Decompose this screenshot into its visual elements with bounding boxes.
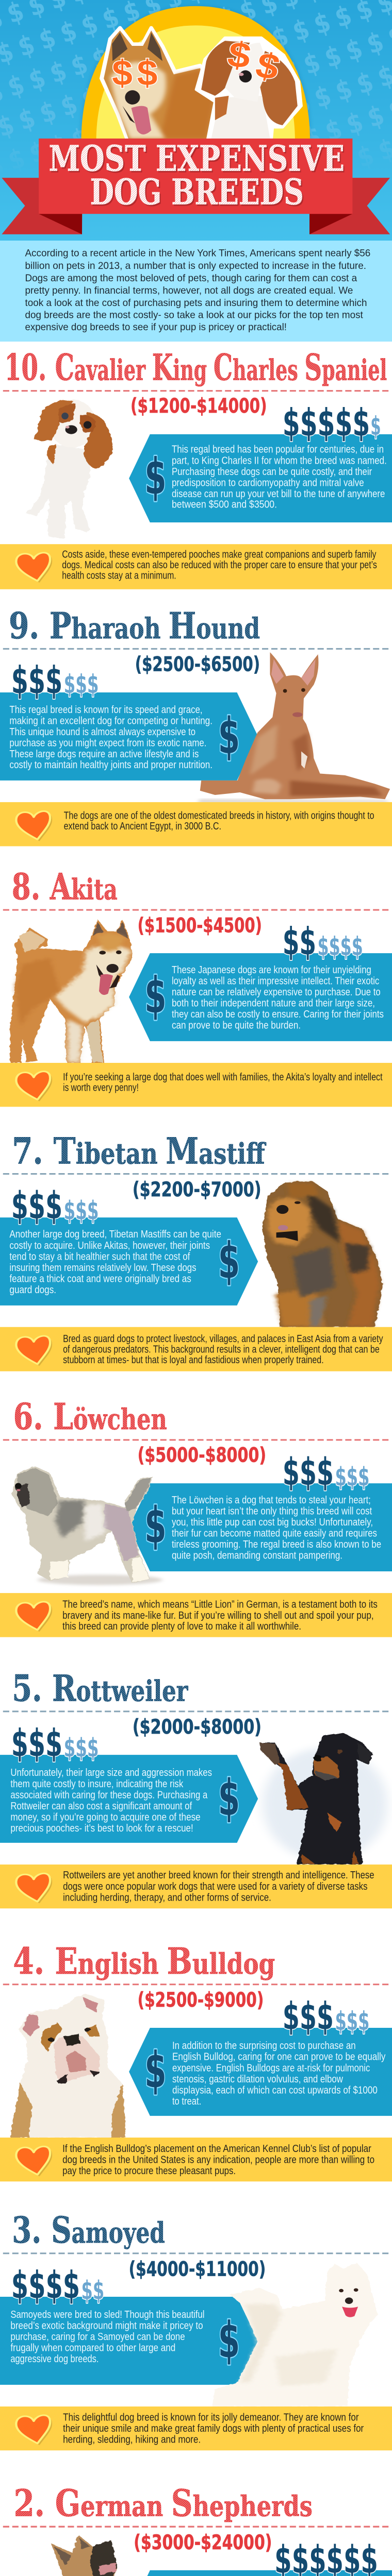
panel: 10 Cavalier King Charles Spaniel: $ — [144, 448, 167, 506]
description: between $500 and $3500. — [172, 499, 277, 510]
samoyed face — [339, 2288, 358, 2317]
description: to treat. — [172, 2095, 201, 2107]
blue description banner — [0, 692, 258, 781]
price rating dollars: $$$ — [11, 1721, 62, 1765]
description — [172, 2040, 386, 2107]
icon: heart — [16, 2146, 52, 2176]
blue description banner — [129, 434, 392, 522]
fact text — [63, 2412, 364, 2445]
price range: ($2200-$7000) — [133, 1178, 262, 1201]
yellow fact band — [0, 544, 392, 589]
header illustration and banner — [2, 6, 390, 234]
blue description banner — [0, 1755, 258, 1843]
fact text — [63, 1870, 374, 1903]
fact text: pay the price to procure these pleasant pups. — [62, 2165, 236, 2177]
pharaoh hound illustration — [198, 652, 390, 803]
price range: ($5000-$8000) — [138, 1444, 266, 1467]
fact text — [64, 810, 374, 832]
yellow fact band — [0, 2138, 392, 2181]
cavalier face — [61, 413, 91, 434]
description: purchase, caring for a Samoyed can be done — [10, 2331, 185, 2343]
description: them quite costly to insure, indicating the risk — [10, 1778, 184, 1790]
title: 2. German Shepherds — [14, 2482, 313, 2524]
title: 6. Löwchen — [13, 1395, 167, 1438]
panel: 7 Tibetan Mastiff: $$$ — [64, 1195, 99, 1226]
akita illustration — [10, 919, 133, 1063]
icon: heart — [16, 1873, 52, 1903]
description — [172, 444, 387, 510]
panel: 5 Rottweiler — [0, 1667, 392, 1908]
panel: 7 Tibetan Mastiff: $ — [218, 1232, 240, 1290]
fact text — [63, 1072, 383, 1094]
icon: heart — [16, 1336, 52, 1366]
icon: cavalier with dollar eyes — [196, 38, 301, 141]
title — [49, 138, 346, 215]
icon: heart — [16, 811, 52, 841]
description — [9, 1229, 221, 1296]
description: This unique hound is almost always expensive to — [9, 726, 195, 738]
description: purchase as you might expect from its exotic name. — [9, 737, 206, 749]
samoyed illustration — [213, 2263, 378, 2406]
sun dome — [81, 6, 310, 141]
fact text: herding, sledding, hiking and more. — [63, 2434, 201, 2445]
dollar eyes: $ — [137, 54, 157, 93]
yellow fact band — [0, 1063, 392, 1107]
description: insuring them remains relatively low. These dogs — [9, 1262, 196, 1274]
yellow fact band — [0, 2406, 392, 2450]
fact text: extend back to Ancient Egypt, in 3000 B.C. — [64, 820, 221, 832]
title: 5. Rottweiler — [12, 1667, 188, 1709]
description: This regal breed is known for its speed and grace, — [9, 704, 203, 716]
price rating dollars: $$$$ — [11, 2263, 80, 2307]
yellow fact band — [0, 1865, 392, 1908]
fact text — [63, 1333, 383, 1366]
fact text — [62, 549, 377, 581]
yellow fact band — [0, 802, 392, 846]
description: associated with caring for these dogs. Purchasing a — [10, 1789, 207, 1801]
title: 4. English Bulldog — [13, 1940, 275, 1982]
description — [10, 2309, 204, 2365]
blue description banner — [0, 2297, 258, 2385]
description: feature a thick coat and were originally bred as — [9, 1273, 191, 1284]
panel: 9 Pharaoh Hound — [0, 604, 392, 846]
description: costly to acquire. Unlike Akitas, however, their joints — [9, 1240, 210, 1251]
fact text — [62, 2143, 374, 2177]
header blue background — [0, 0, 392, 241]
lowchen illustration — [11, 1466, 162, 1585]
title: 9. Pharaoh Hound — [9, 604, 260, 647]
description — [9, 704, 213, 771]
bulldog illustration — [10, 1993, 126, 2138]
panel: 9 Pharaoh Hound: $ — [218, 707, 240, 765]
description: Samoyeds were bred to sled! Though this beautiful — [10, 2309, 204, 2320]
intro text: expensive dog breeds to see if your pup is pricey or practical! — [25, 321, 287, 332]
icon: heart — [16, 553, 52, 583]
description: guard dogs. — [9, 1284, 56, 1296]
description: These large dogs require an active lifestyle and is — [9, 748, 199, 760]
price rating dollars — [11, 2263, 104, 2307]
panel: 5 Rottweiler: $ — [218, 1770, 240, 1827]
lowchen face — [15, 1483, 22, 1491]
description: tend to stay a bit healthier such that the cost of — [9, 1251, 190, 1262]
price rating dollars: $$$ — [11, 658, 62, 702]
description: making it an excellent dog for competing or hunting. — [9, 715, 213, 726]
price rating dollars: $$ — [283, 919, 316, 963]
cavalier photo illustration — [26, 400, 113, 538]
price range: ($3000-$24000) — [134, 2531, 272, 2554]
panel: 2 German Shepherds — [0, 2482, 392, 2576]
dollar eyes: $ — [112, 54, 133, 93]
description: Another large dog breed, Tibetan Mastiffs can be quite — [9, 1229, 221, 1240]
intro text — [25, 247, 370, 332]
photo glow background — [263, 1748, 387, 1860]
dollar eyes — [112, 35, 284, 93]
akita face — [96, 951, 122, 995]
panel: 6 Lowchen — [0, 1395, 392, 1637]
blue description banner — [129, 1483, 392, 1571]
panel: introduction — [0, 241, 392, 342]
description: can prove to be quite the burden. — [172, 1020, 301, 1031]
blue description banner — [129, 2570, 392, 2576]
panel: 10 Cavalier King Charles Spaniel — [0, 346, 392, 589]
rottweiler illustration — [260, 1733, 373, 1865]
description: costly to maintain healthy joints and proper nutrition. — [9, 759, 213, 771]
icon: heart — [16, 1072, 52, 1101]
description: aggressive dog breeds. — [10, 2353, 99, 2365]
panel: 6 Lowchen: $ — [144, 1497, 167, 1554]
price range: ($2000-$8000) — [133, 1715, 262, 1739]
panel: 3 Samoyed: $ — [218, 2312, 240, 2369]
description: precious pooches- it’s best to look for a rescue! — [10, 1822, 193, 1834]
panel: 3 Samoyed: $$ — [81, 2275, 104, 2305]
panel: 7 Tibetan Mastiff — [0, 1129, 392, 1371]
yellow fact band — [0, 1593, 392, 1637]
title: 7. Tibetan Mastiff — [12, 1129, 266, 1172]
blue description banner — [129, 2028, 392, 2116]
title ribbon — [2, 139, 390, 234]
icon: akita with dollar eyes — [101, 27, 218, 141]
price range: ($1500-$4500) — [138, 913, 262, 937]
price range: ($2500-$6500) — [135, 653, 260, 676]
price range: ($2500-$9000) — [138, 1988, 264, 2011]
panel: 9 Pharaoh Hound: $$$ — [64, 669, 99, 699]
yellow fact band — [0, 1327, 392, 1371]
blue description banner — [0, 1217, 258, 1306]
price rating dollars: $$$ — [11, 1183, 62, 1228]
description: breed’s exotic background might make it pricey to — [10, 2320, 203, 2331]
description: frugally when compared to other large and — [10, 2342, 175, 2353]
mastiff face — [276, 1201, 301, 1241]
dollar eyes: $ — [225, 35, 254, 76]
panel: 4 English Bulldog — [0, 1940, 392, 2181]
fact text: health costs stay at a minimum. — [62, 570, 176, 581]
german shepherd illustration — [23, 2535, 118, 2576]
title: 8. Akita — [12, 865, 118, 908]
description: Unfortunately, their large size and aggression makes — [10, 1767, 212, 1778]
panel: 5 Rottweiler: $$$ — [64, 1733, 99, 1763]
fact text: is worth every penny! — [63, 1082, 139, 1094]
description — [10, 1767, 212, 1834]
tibetan mastiff illustration — [263, 1181, 383, 1327]
description — [172, 964, 384, 1031]
description: Rottweiler can also cost a significant amount of — [10, 1800, 192, 1812]
icon: heart — [16, 1602, 52, 1632]
panel: header — [0, 0, 392, 241]
price range: ($1200-$14000) — [130, 394, 267, 417]
title: 3. Samoyed — [12, 2209, 165, 2251]
description — [172, 1494, 381, 1562]
fact text — [62, 1599, 378, 1632]
panel: 3 Samoyed — [0, 2209, 392, 2450]
panel: 8 Akita: $ — [144, 967, 167, 1025]
price range: ($4000-$11000) — [129, 2258, 266, 2281]
panel: 8 Akita — [0, 865, 392, 1107]
blue description banner — [129, 953, 392, 1041]
dollar eyes: $ — [252, 45, 284, 88]
panel: 4 English Bulldog: $ — [144, 2042, 167, 2099]
description: money, so if you’re going to acquire one of these — [10, 1811, 201, 1823]
icon: heart — [16, 2415, 52, 2445]
